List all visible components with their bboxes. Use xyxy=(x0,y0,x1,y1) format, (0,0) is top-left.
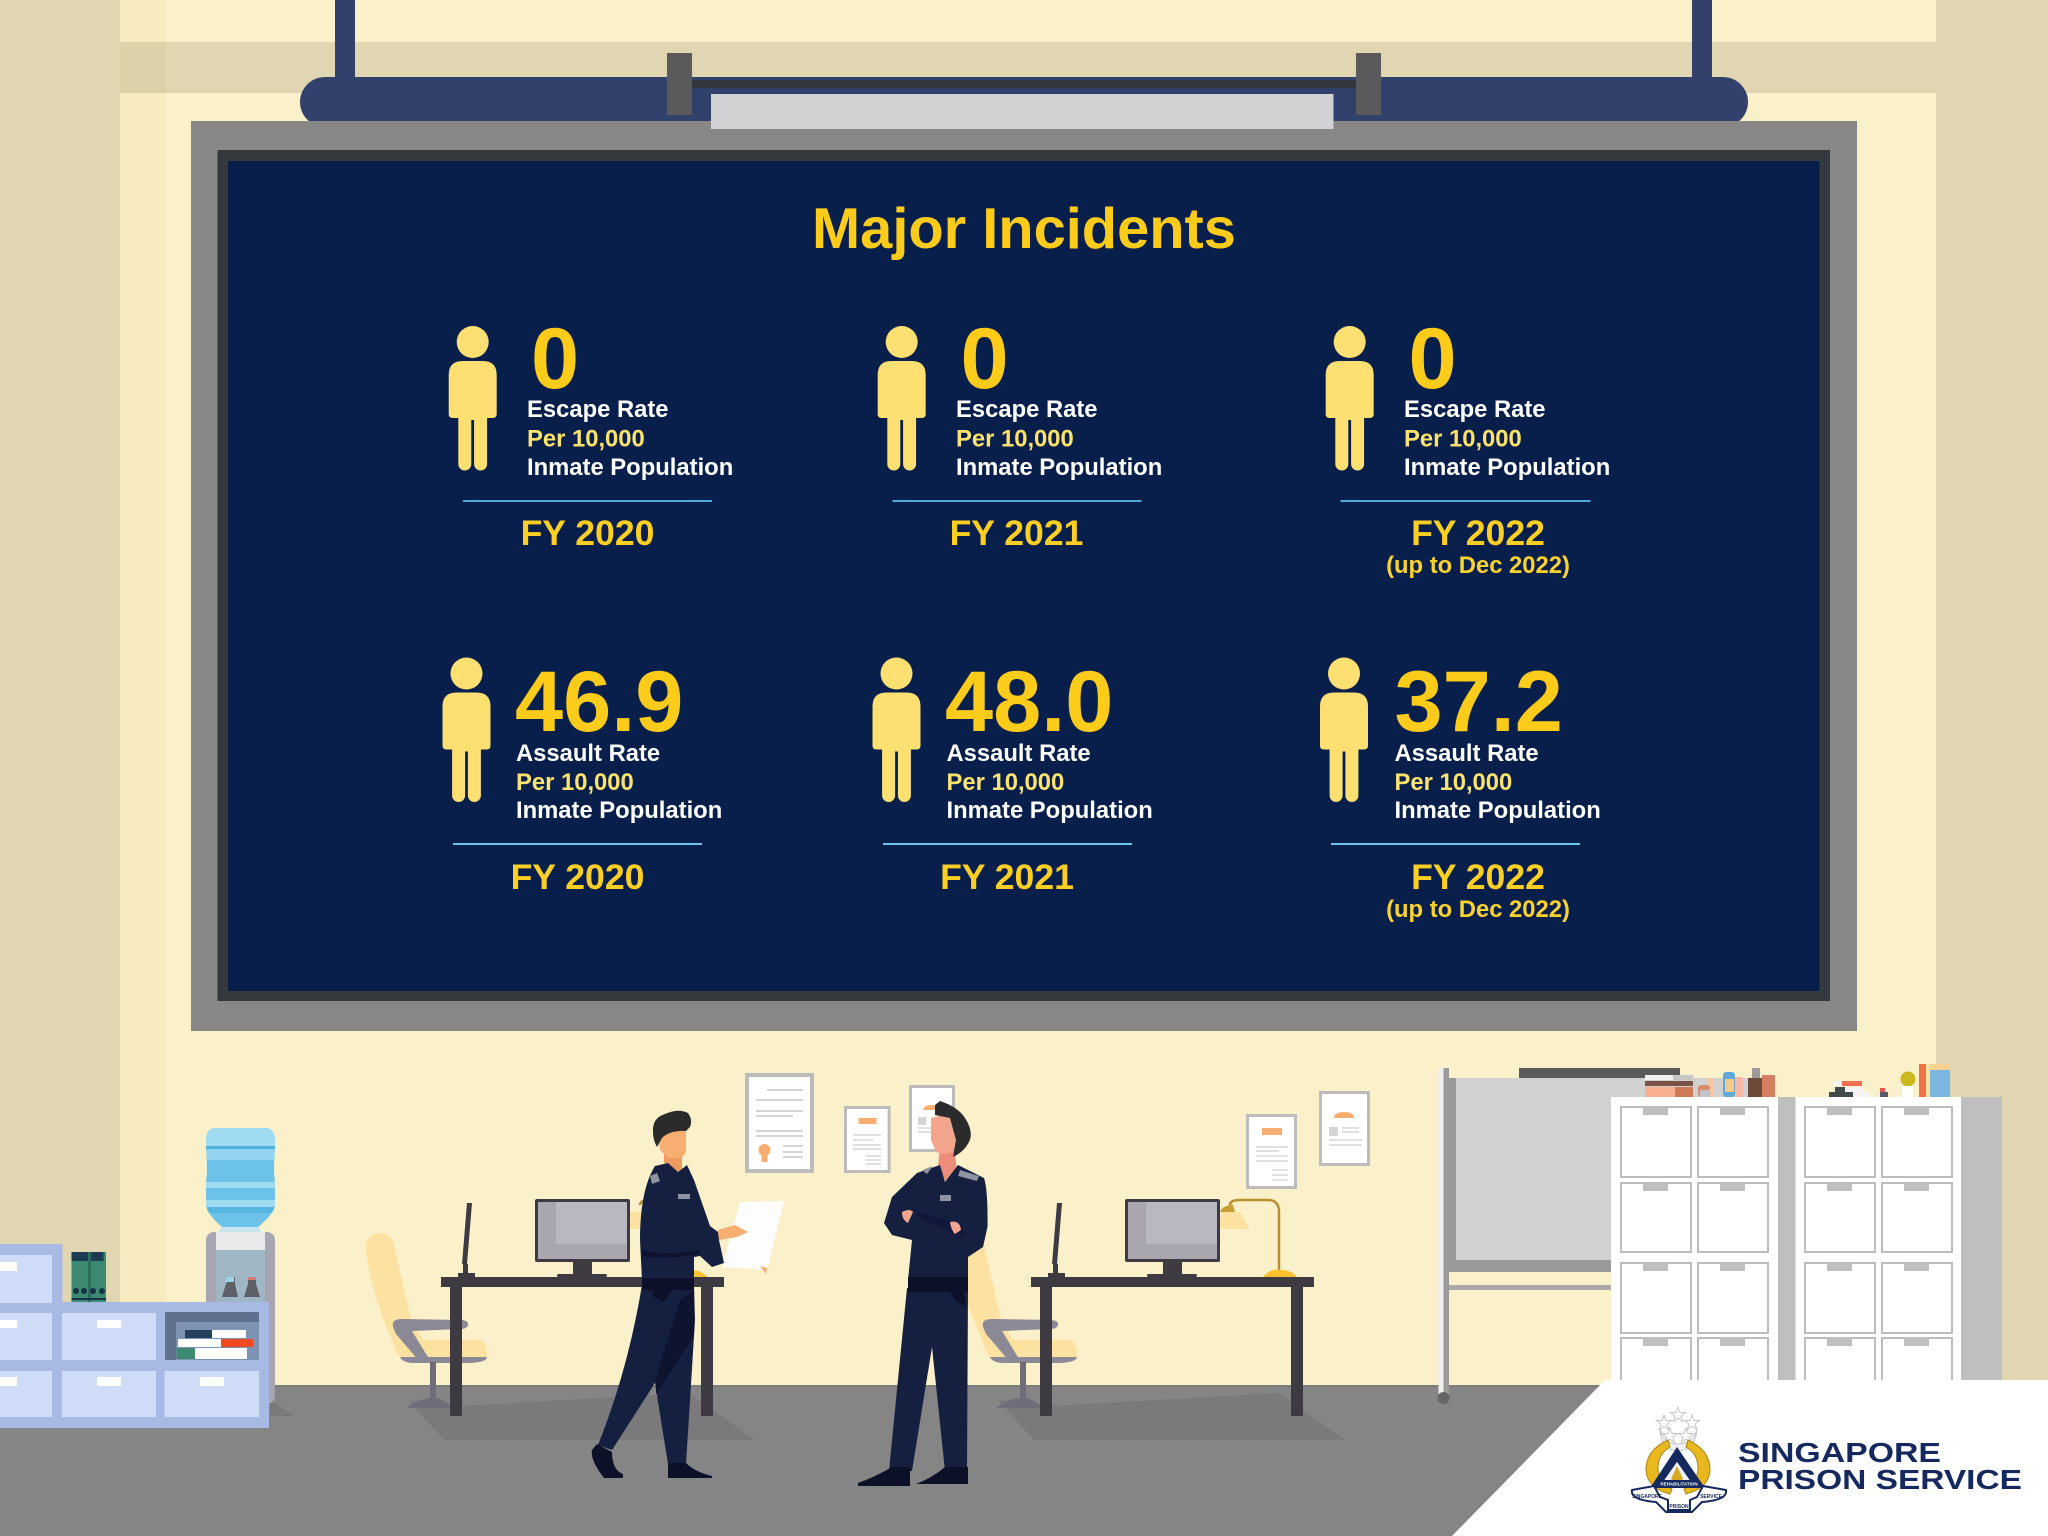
white corner panel xyxy=(1452,1380,2048,1536)
stat: assault rate FY 2022 xyxy=(1320,654,1601,923)
year: FY 2022 xyxy=(1411,857,1545,897)
description: Inmate Population xyxy=(1394,797,1601,824)
icon: person xyxy=(872,658,920,802)
value: 0 xyxy=(1408,311,1457,407)
whiteboard xyxy=(1438,1068,1750,1404)
certificate 2 xyxy=(844,1106,891,1173)
cubby with stacked books xyxy=(165,1312,259,1360)
icon: person xyxy=(1326,326,1374,470)
description: Escape Rate xyxy=(527,396,669,423)
chair xyxy=(956,1233,1077,1408)
icon: person xyxy=(1320,658,1368,802)
items on top of the lockers xyxy=(1645,1064,1950,1097)
scroll: SERVICE xyxy=(1700,1494,1723,1500)
water bottle xyxy=(206,1128,275,1227)
belt xyxy=(642,1278,694,1302)
shoes xyxy=(858,1467,968,1486)
wreath xyxy=(1646,1440,1710,1494)
side panel xyxy=(1048,1203,1065,1277)
certificate 4 xyxy=(1246,1114,1297,1189)
screen mounting rail xyxy=(300,0,1748,127)
description: Assault Rate xyxy=(516,740,660,767)
crescent xyxy=(1660,1428,1697,1451)
logo: wordmark: PRISON SERVICE xyxy=(1738,1464,2022,1495)
scroll: PRISON xyxy=(1669,1504,1689,1510)
floor xyxy=(0,1385,2048,1536)
year: FY 2020 xyxy=(511,857,644,897)
shoes xyxy=(592,1444,712,1478)
screen light bar xyxy=(711,94,1334,129)
monitor xyxy=(535,1199,630,1277)
uniform with crossed arms xyxy=(884,1165,988,1280)
description: Escape Rate xyxy=(1404,396,1546,423)
period note: (up to Dec 2022) xyxy=(1386,552,1570,579)
stat: assault rate FY 2021 xyxy=(872,654,1153,897)
value: 48.0 xyxy=(945,654,1113,750)
stat: escape rate FY 2022 xyxy=(1326,311,1610,579)
year: FY 2021 xyxy=(950,513,1083,553)
desk and chair, right xyxy=(956,1199,1345,1440)
value: 0 xyxy=(531,311,579,407)
stars xyxy=(1656,1407,1700,1442)
filing cabinet xyxy=(0,1244,269,1428)
green binders xyxy=(72,1252,106,1302)
desk xyxy=(441,1277,724,1416)
desk xyxy=(1031,1277,1314,1416)
hands xyxy=(718,1225,767,1274)
description: Per 10,000 xyxy=(946,769,1064,796)
description: Assault Rate xyxy=(1394,740,1539,767)
stat: escape rate FY 2020 xyxy=(449,311,733,553)
stat: escape rate FY 2021 xyxy=(878,311,1162,553)
description: Per 10,000 xyxy=(527,426,645,452)
uniform xyxy=(640,1163,724,1280)
motto ribbon xyxy=(1662,1480,1696,1487)
year: FY 2020 xyxy=(521,513,654,553)
icon: person xyxy=(442,658,490,802)
officer with crossed arms xyxy=(858,1101,988,1486)
logo: prison service emblem: REHABILITATION xyxy=(1660,1482,1698,1486)
head xyxy=(931,1101,971,1182)
legs xyxy=(889,1288,968,1471)
insignia xyxy=(922,1166,979,1181)
side panel xyxy=(458,1203,475,1277)
description: Inmate Population xyxy=(946,797,1153,824)
belt xyxy=(908,1277,968,1306)
description: Inmate Population xyxy=(956,454,1162,481)
certificate 3 xyxy=(909,1085,955,1152)
description: Inmate Population xyxy=(1404,454,1610,481)
certificate 5 xyxy=(1319,1091,1370,1166)
description: Per 10,000 xyxy=(1394,769,1512,796)
chair xyxy=(366,1233,487,1408)
legs xyxy=(598,1285,695,1464)
description: Per 10,000 xyxy=(516,769,634,796)
water cooler xyxy=(200,1125,295,1416)
certificate 1 xyxy=(745,1073,814,1173)
desk lamp xyxy=(628,1200,707,1277)
description: Per 10,000 xyxy=(1404,426,1522,452)
description: Per 10,000 xyxy=(956,426,1074,452)
stat: assault rate FY 2020 xyxy=(442,654,722,897)
head xyxy=(653,1111,691,1172)
year: FY 2021 xyxy=(940,857,1074,897)
panel: display screen xyxy=(191,121,1857,1031)
logo: wordmark xyxy=(1738,1437,2022,1495)
scroll: SINGAPORE xyxy=(1632,1494,1663,1500)
insignia xyxy=(650,1173,660,1184)
description: Inmate Population xyxy=(516,797,722,824)
year: FY 2022 xyxy=(1411,513,1545,553)
desk lamp xyxy=(1218,1200,1297,1277)
description: Escape Rate xyxy=(956,396,1098,423)
icon: person xyxy=(878,326,926,470)
logo: prison service emblem xyxy=(1632,1407,1726,1512)
locker cabinets xyxy=(1611,1097,2002,1408)
value: 37.2 xyxy=(1394,654,1563,750)
scroll xyxy=(1632,1486,1726,1512)
wall certificates xyxy=(745,1073,1370,1189)
desk and chair, left xyxy=(366,1199,755,1440)
monitor xyxy=(1125,1199,1220,1277)
value: 46.9 xyxy=(515,654,683,750)
hands xyxy=(902,1210,961,1234)
document xyxy=(722,1201,784,1270)
officer holding a document xyxy=(592,1111,784,1478)
icon: person xyxy=(449,326,497,470)
description: Assault Rate xyxy=(946,740,1091,767)
logo: wordmark: SINGAPORE xyxy=(1738,1437,1941,1468)
title: Major Incidents xyxy=(812,197,1236,261)
triangle xyxy=(1650,1447,1705,1488)
value: 0 xyxy=(960,311,1009,407)
period note: (up to Dec 2022) xyxy=(1386,896,1570,923)
description: Inmate Population xyxy=(527,454,733,481)
